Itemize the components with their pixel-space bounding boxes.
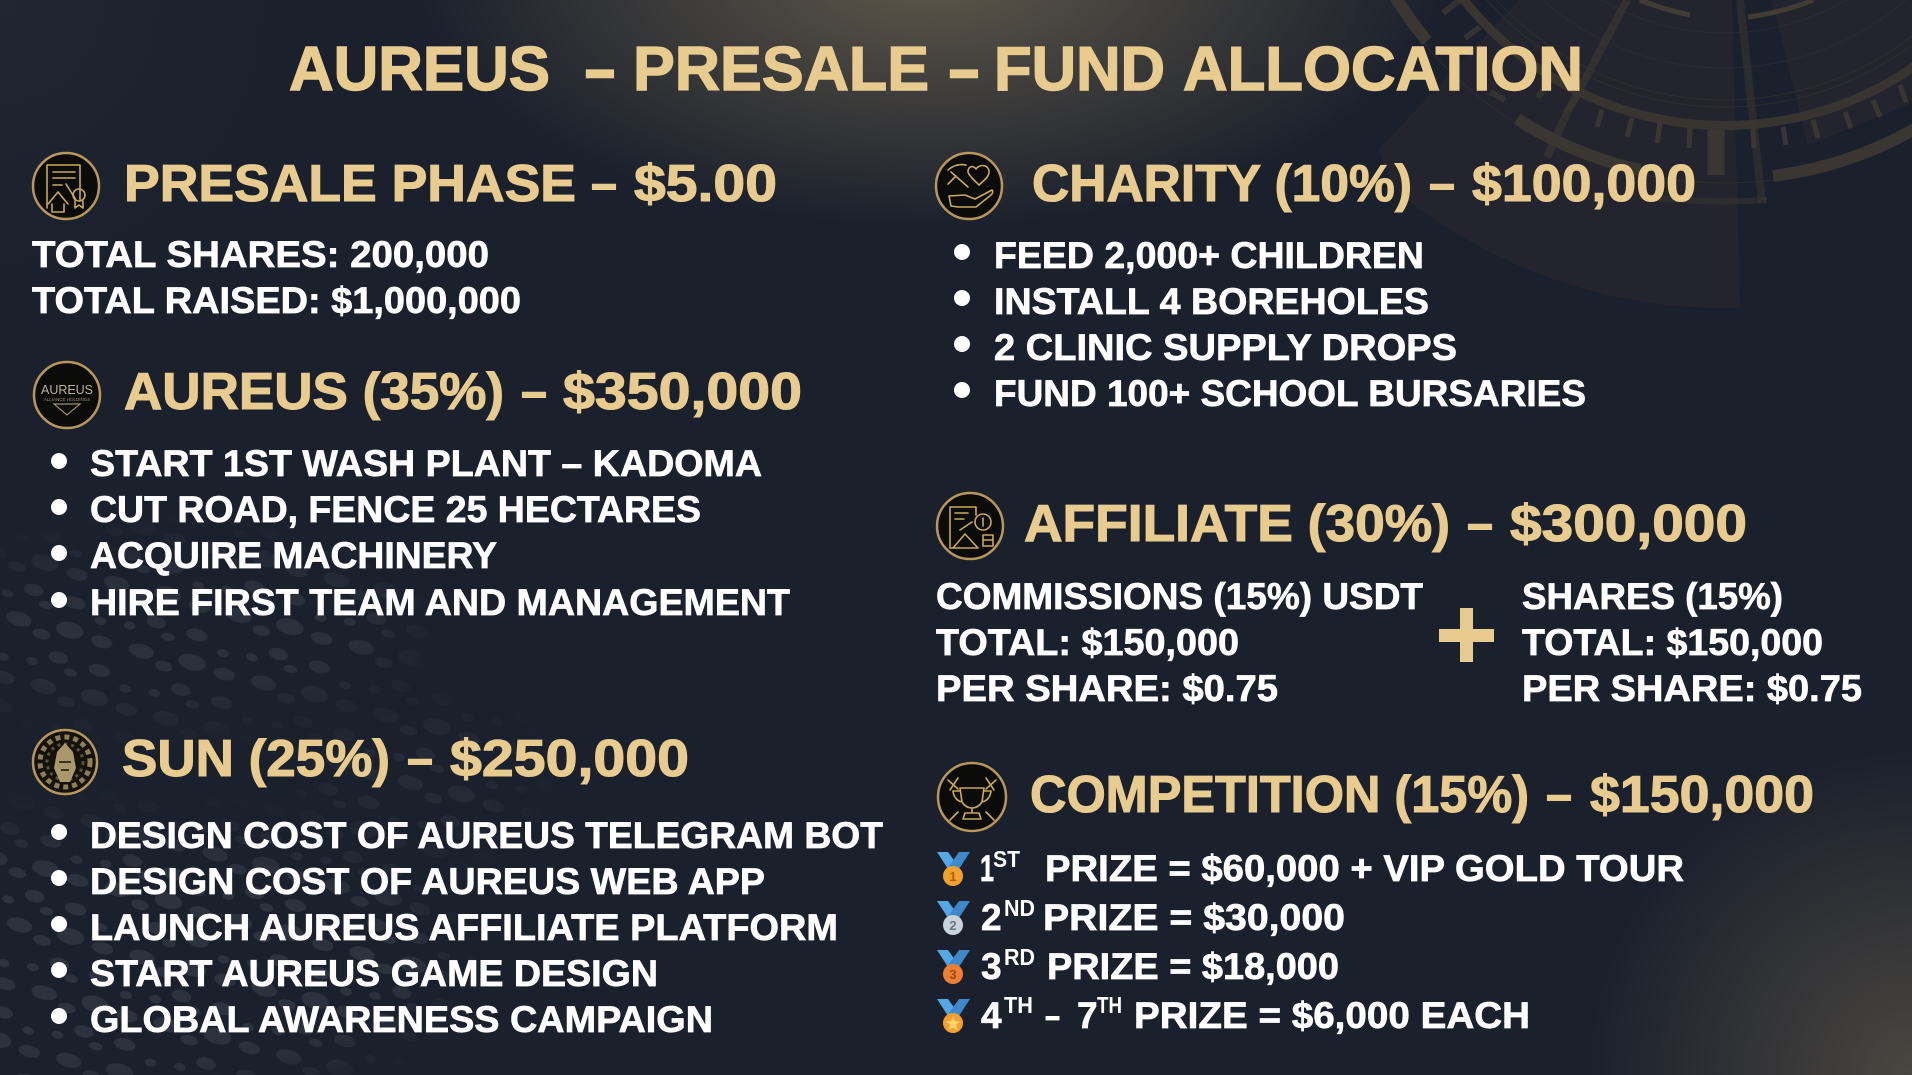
list: aureus items: CUT ROAD, FENCE 25 HECTARES xyxy=(90,489,701,530)
row: fourth to seventh prize: 4 xyxy=(981,995,1002,1036)
list: sun items xyxy=(51,815,883,1040)
panel: competition xyxy=(937,763,1814,1036)
text: shares column: SHARES (15%) xyxy=(1522,576,1783,617)
heading: sun: $250,000 xyxy=(450,730,689,788)
text: commissions column xyxy=(936,576,1423,709)
row: fourth to seventh prize: 7 xyxy=(1077,995,1098,1036)
title: AUREUS xyxy=(289,35,550,104)
row: fourth to seventh prize: – xyxy=(1045,995,1060,1036)
panel: charity xyxy=(936,153,1696,414)
icon: competition trophy xyxy=(938,763,1006,831)
row: third prize: RD xyxy=(1004,944,1035,970)
icon: aureus logo: ALLIANCE HOLDINGS xyxy=(44,397,90,402)
icon: aureus logo xyxy=(34,362,100,428)
heading: presale phase xyxy=(124,155,777,213)
row: fourth to seventh prize: TH xyxy=(1097,992,1122,1018)
heading: charity: $100,000 xyxy=(1472,155,1696,213)
row: fourth to seventh prize xyxy=(937,992,1530,1036)
icon: plus sign xyxy=(1439,608,1494,662)
list: charity items xyxy=(954,235,1586,414)
row: second prize: PRIZE = $30,000 xyxy=(1043,897,1345,938)
background: dial decoration xyxy=(1332,0,1912,308)
text: shares column: PER SHARE: $0.75 xyxy=(1522,668,1862,709)
heading: affiliate: $300,000 xyxy=(1510,495,1747,553)
text: shares column xyxy=(1522,576,1862,709)
row: second prize: 2 xyxy=(981,897,1002,938)
list: sun items: DESIGN COST OF AUREUS TELEGRAM BOT xyxy=(90,815,883,856)
heading: affiliate: AFFILIATE (30%) xyxy=(1024,495,1450,553)
panel: aureus xyxy=(34,362,802,623)
icon: silver medal 2 xyxy=(937,901,970,935)
icon: charity hand and heart xyxy=(936,153,1002,219)
list: charity items: 2 CLINIC SUPPLY DROPS xyxy=(994,327,1457,368)
heading: competition: – xyxy=(1546,766,1572,824)
title xyxy=(289,35,1583,104)
text: total shares: TOTAL SHARES: 200,000 xyxy=(32,234,489,275)
row: first prize: ST xyxy=(993,846,1020,872)
list: aureus items xyxy=(51,443,790,623)
list: charity items: INSTALL 4 BOREHOLES xyxy=(994,281,1429,322)
title: FUND xyxy=(994,35,1165,104)
panel: affiliate xyxy=(936,493,1862,709)
list: sun items: DESIGN COST OF AUREUS WEB APP xyxy=(90,861,765,902)
row: first prize: 1 xyxy=(980,848,994,889)
heading: aureus xyxy=(124,363,802,421)
icon: bronze medal 3 xyxy=(937,950,970,984)
list: aureus items: HIRE FIRST TEAM AND MANAGEMENT xyxy=(90,582,790,623)
row: second prize: ND xyxy=(1004,895,1035,921)
title: PRESALE xyxy=(633,35,929,104)
icon: gold medal 1: 1 xyxy=(949,869,957,884)
icon: gold medal 1 xyxy=(937,852,970,886)
title: - xyxy=(947,35,981,104)
heading: competition: COMPETITION (15%) xyxy=(1030,766,1529,824)
heading: competition xyxy=(1030,766,1814,824)
row: fourth to seventh prize: TH xyxy=(1004,992,1033,1018)
heading: presale phase: $5.00 xyxy=(634,155,777,213)
text: commissions column: TOTAL: $150,000 xyxy=(936,622,1239,663)
list: charity items: FEED 2,000+ CHILDREN xyxy=(994,235,1424,276)
list: aureus items: ACQUIRE MACHINERY xyxy=(90,535,497,576)
row: third prize: 3 xyxy=(981,946,1002,987)
background: dotted wave pattern xyxy=(0,548,498,1075)
text: total raised: TOTAL RAISED: $1,000,000 xyxy=(32,280,521,321)
icon: affiliate document and coin xyxy=(937,493,1003,559)
text: commissions column: COMMISSIONS (15%) USDT xyxy=(936,576,1423,617)
list: sun items: LAUNCH AUREUS AFFILIATE PLATFORM xyxy=(90,907,838,948)
list: aureus items: START 1ST WASH PLANT – KADOMA xyxy=(90,443,762,484)
icon: presale document xyxy=(33,153,99,219)
heading: presale phase: PRESALE PHASE xyxy=(124,155,576,213)
list: sun items: GLOBAL AWARENESS CAMPAIGN xyxy=(90,999,713,1040)
list: sun items: START AUREUS GAME DESIGN xyxy=(90,953,658,994)
title: - xyxy=(583,35,617,104)
heading: affiliate xyxy=(1024,495,1747,553)
text: shares column: TOTAL: $150,000 xyxy=(1522,622,1823,663)
heading: charity: CHARITY (10%) xyxy=(1032,155,1412,213)
panel: sun xyxy=(33,730,883,1040)
icon: sun coin xyxy=(33,730,97,794)
list: charity items: FUND 100+ SCHOOL BURSARIES xyxy=(994,373,1586,414)
heading: aureus: – xyxy=(521,363,547,421)
title: ALLOCATION xyxy=(1183,35,1583,104)
panel: presale phase xyxy=(32,153,777,321)
heading: sun xyxy=(122,730,689,788)
row: fourth to seventh prize: PRIZE = $6,000 EACH xyxy=(1134,995,1530,1036)
heading: presale phase: – xyxy=(591,155,617,213)
icon: silver medal 2: 2 xyxy=(949,918,957,933)
heading: affiliate: – xyxy=(1467,495,1493,553)
row: third prize xyxy=(937,944,1339,987)
row: third prize: PRIZE = $18,000 xyxy=(1047,946,1339,987)
heading: competition: $150,000 xyxy=(1590,766,1814,824)
heading: aureus: $350,000 xyxy=(563,363,802,421)
heading: charity xyxy=(1032,155,1696,213)
icon: bronze medal 3: 3 xyxy=(949,967,957,982)
heading: aureus: AUREUS (35%) xyxy=(124,363,504,421)
row: first prize: PRIZE = $60,000 + VIP GOLD TOUR xyxy=(1045,848,1684,889)
heading: sun: SUN (25%) xyxy=(122,730,390,788)
text: commissions column: PER SHARE: $0.75 xyxy=(936,668,1278,709)
heading: sun: – xyxy=(407,730,433,788)
icon: star medal xyxy=(937,999,970,1033)
heading: charity: – xyxy=(1429,155,1455,213)
row: second prize xyxy=(937,895,1345,938)
icon: aureus logo: AUREUS xyxy=(41,383,93,397)
